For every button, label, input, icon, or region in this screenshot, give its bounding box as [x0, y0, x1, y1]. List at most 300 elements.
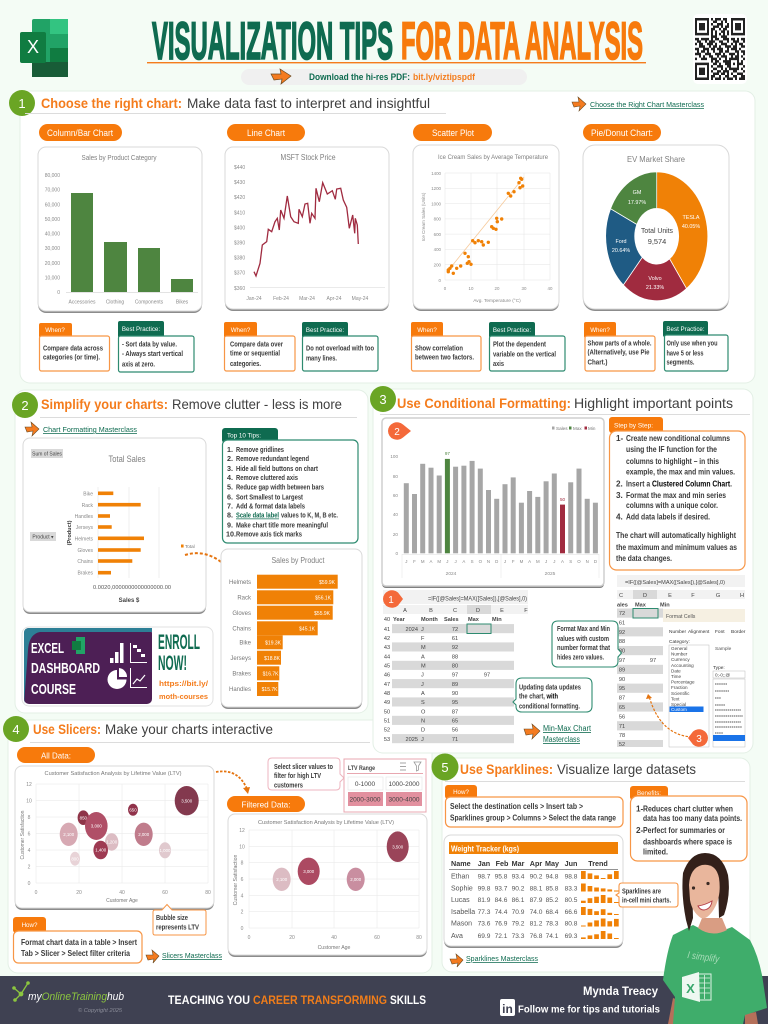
promo: excel dashboard course: moth-courses: [159, 692, 208, 701]
top 10 tips: 9.: [227, 520, 233, 530]
chart: sales by product category: 80,000: [45, 173, 60, 179]
chart: all data bubble: 6: [28, 832, 31, 838]
chart: all data bubble: 850: [80, 815, 88, 820]
spreadsheet: format cells dialog: 0;-0;;@: [715, 672, 730, 678]
spreadsheet: format cells dialog: Special: [671, 702, 686, 707]
table: weight tracker: 72.1: [495, 933, 508, 940]
chart: ice cream scatter: 1400: [431, 171, 442, 176]
step by step: 4.: [616, 512, 623, 522]
benefits box: 2-: [636, 826, 644, 835]
chart: filtered bubble: 2,000: [350, 877, 362, 882]
chart: sales by product category: 40,000: [45, 232, 60, 238]
spreadsheet: format cells dialog: Currency: [671, 657, 690, 662]
chart: min max columns: A: [561, 559, 564, 564]
author: Mynda Treacy: [583, 984, 658, 998]
chart: min max columns: 0: [395, 551, 398, 556]
benefits box: [630, 786, 747, 861]
chart: min max columns: 100: [390, 454, 398, 459]
table: weight tracker: 70.9: [512, 909, 525, 916]
heading 1: Make data fast to interpret and insightful: [187, 95, 430, 111]
chart: filtered bubble: Customer Satisfaction: [233, 855, 239, 905]
table: weight tracker: 80.8: [565, 920, 578, 928]
author: [500, 984, 660, 1016]
callout: format max and min: hides zero values.: [557, 652, 604, 662]
chart: total sales cluttered: Gloves: [77, 548, 93, 554]
table: weight tracker: 66.6: [565, 909, 578, 916]
chart: ice cream scatter: 800: [434, 216, 442, 222]
chart: sales by product clean: $19.3K: [265, 640, 282, 646]
chart: sales by product category: 0: [57, 290, 60, 296]
chart: MSFT stock price: MSFT Stock Price: [280, 153, 336, 162]
chart: min max columns: 2025: [545, 571, 556, 577]
spreadsheet: format cells dialog: 88: [619, 639, 625, 645]
chart: all data bubble: 1,400: [95, 848, 107, 853]
chart: EV market share donut: 21.33%: [646, 285, 664, 291]
link: min max masterclass: [524, 724, 592, 744]
spreadsheet: format cells dialog: 92: [619, 630, 625, 636]
when box: When?: [45, 327, 65, 334]
chart: sales by product clean: Sales by Product: [272, 556, 325, 565]
spreadsheet: left table: 71: [452, 737, 458, 743]
callout: format max and min: [552, 621, 622, 667]
line chart block: [224, 124, 389, 371]
top 10 tips: Hide all field buttons on chart: [236, 464, 318, 473]
table: weight tracker: 81.2: [530, 920, 543, 928]
spreadsheet: format cells dialog: 65: [619, 705, 625, 711]
top 10 tips: Remove axis tick marks: [236, 530, 302, 538]
chart: min max columns: M: [520, 559, 524, 564]
chart: min max columns: J: [405, 559, 407, 564]
chart: all data bubble: 60: [162, 890, 168, 896]
table: weight tracker: Lucas: [451, 897, 470, 904]
spreadsheet: left table: M: [421, 664, 426, 670]
step by step: 1-: [616, 434, 624, 443]
spreadsheet: format cells dialog: Percentage: [671, 680, 695, 685]
spreadsheet: left table: A: [421, 691, 425, 697]
chart: min max columns: J: [454, 559, 457, 564]
best practice box: axis: [493, 359, 504, 368]
chart: filtered bubble: Customer Age: [318, 945, 351, 951]
spreadsheet: format cells dialog: =IF([@Sales]=MAX([Sales]),[@Sales],0): [625, 580, 725, 586]
badge 1: [9, 90, 35, 116]
spreadsheet: left table: 42: [384, 636, 390, 642]
benefits box: dashboards where space is: [643, 838, 732, 846]
table: weight tracker: Ethan: [451, 874, 469, 880]
table: weight tracker: 76.8: [530, 933, 543, 940]
benefits box: Perfect for summaries or: [643, 826, 726, 835]
chart: total sales cluttered: Sum of Sales: [32, 452, 62, 458]
panel: use sparklines: [432, 754, 750, 972]
top 10 tips: 5.: [227, 482, 233, 492]
when box: When?: [590, 327, 610, 334]
best practice box: Best Practice:: [122, 326, 160, 333]
how box: Tab > Slicer > Select filter criteria: [21, 949, 130, 958]
step by step: Create new conditional columns: [626, 434, 730, 443]
spreadsheet: format cells dialog: Scientific: [671, 691, 690, 696]
spreadsheet: left table: 89: [452, 682, 458, 688]
when box: time or sequential: [230, 348, 280, 358]
chart: EV market share donut: [583, 145, 729, 311]
icon: shirt excel logo: [682, 972, 711, 1002]
table: weight tracker: Jun: [565, 859, 577, 868]
when box: Show correlation: [415, 344, 463, 352]
table: weight tracker: 73.6: [478, 920, 491, 928]
when box: When?: [417, 327, 437, 334]
chart: all data bubble: 650: [129, 807, 137, 812]
chart: min max columns: J: [553, 559, 555, 564]
chart: sales by product clean: [221, 549, 362, 709]
chart: min max columns: D: [594, 559, 597, 564]
chart: filtered bubble: [228, 814, 427, 957]
callout: sparklines are mini charts: [616, 883, 678, 907]
best practice box: Do not overload with too: [306, 344, 374, 352]
chart: MSFT stock price: $370: [234, 270, 245, 276]
spreadsheet: format cells dialog: Date: [671, 668, 681, 673]
how box: Sparklines group > Columns > Select the data range: [450, 814, 616, 822]
spreadsheet: format cells dialog: 95: [619, 686, 625, 692]
top 10 tips: Add & format data labels: [236, 502, 305, 510]
spreadsheet: left table: 80: [452, 664, 458, 670]
how box: How?: [22, 922, 38, 929]
icon: excel small: [72, 637, 85, 654]
pill: filtered data: Filtered Data:: [242, 800, 290, 810]
tagline: CAREER TRANSFORMING: [253, 993, 387, 1007]
chart: sales by product clean: Rack: [237, 596, 252, 602]
spreadsheet: left table: 92: [452, 645, 458, 651]
chart: min max columns: O: [577, 559, 581, 564]
best practice box: [663, 321, 728, 371]
chart: filtered bubble: 12: [239, 828, 245, 834]
logo: © Copyright 2025: [78, 1007, 122, 1014]
link: chart masterclass: Choose the Right Chart Masterclass: [590, 100, 704, 109]
spreadsheet: left table: F: [524, 608, 528, 614]
chart: min max columns: A: [462, 559, 465, 564]
chart: filtered bubble: 2,100: [276, 877, 288, 882]
chart: EV market share donut: EV Market Share: [627, 155, 686, 164]
pill: all data: All Data:: [41, 750, 71, 760]
spreadsheet: format cells dialog: ales: [617, 602, 628, 608]
chart: min max columns: M: [437, 559, 441, 564]
spreadsheet: left table: 87: [452, 710, 458, 716]
link: min max masterclass: Masterclass: [543, 735, 580, 744]
heading 1: [25, 95, 446, 114]
badge: step 1: [383, 590, 403, 608]
callout: sparklines are mini charts: in-cell mini charts.: [622, 896, 671, 904]
download link pill: bit.ly/viztipspdf: [413, 72, 476, 82]
spreadsheet: format cells dialog: 80: [619, 649, 625, 655]
top 10 tips: 7.: [227, 502, 233, 510]
callout: select slicer values: Select slicer values to: [274, 762, 333, 771]
best practice box: Best Practice:: [306, 327, 344, 334]
top 10 tips: Remove redundant legend: [236, 454, 309, 463]
chart: filtered bubble: 2: [241, 910, 244, 916]
spreadsheet: format cells dialog: Accounting: [671, 663, 694, 668]
footer: [0, 976, 768, 1024]
best practice box: Best Practice:: [493, 327, 531, 334]
spreadsheet: left table: 97: [484, 672, 490, 678]
spreadsheet: left table: 51: [384, 718, 390, 724]
spreadsheet: left table: 72: [452, 627, 458, 633]
chart: ice cream scatter: 200: [434, 262, 442, 268]
callout: select slicer values: [268, 758, 344, 790]
table: weight tracker: 86.1: [512, 897, 525, 904]
chart: total sales cluttered: Jerseys: [76, 525, 93, 531]
spreadsheet: left table: J: [421, 682, 424, 688]
chart: MSFT stock price: [225, 147, 389, 311]
step by step: Add data labels if desired.: [626, 512, 710, 522]
table: weight tracker: 74.4: [495, 909, 508, 916]
chart: filtered bubble: 60: [374, 935, 380, 941]
chart: MSFT stock price: $400: [234, 226, 245, 232]
chart: all data bubble: 1,000: [160, 848, 171, 853]
chart: MSFT stock price: $360: [234, 286, 245, 292]
chart: EV market share donut: 40.05%: [682, 224, 700, 230]
spreadsheet: left table: 44: [384, 654, 390, 660]
chart: all data bubble: 2,100: [63, 832, 75, 837]
photo: presenter: [663, 853, 767, 1024]
table: weight tracker: 81.9: [478, 897, 491, 904]
scatter plot block: [411, 124, 565, 371]
chart: total sales cluttered: Helmets: [75, 536, 93, 542]
chart: min max columns: J: [545, 559, 547, 564]
spreadsheet: format cells dialog: Time: [671, 674, 681, 679]
chart: sales by product category: 60,000: [45, 202, 60, 208]
chart: sales by product clean: Chains: [232, 626, 251, 632]
promo: excel dashboard course: NOW!: [158, 652, 187, 675]
slicer: LTV range: 0-1000: [355, 781, 375, 788]
spreadsheet: left table: D: [421, 728, 425, 734]
table: weight tracker: Isabella: [451, 909, 475, 916]
link: chart formatting masterclass: Chart Formatting Masterclass: [43, 425, 137, 434]
chart: MSFT stock price: $410: [234, 210, 245, 216]
chart: min max columns: S: [471, 559, 474, 564]
chart: filtered bubble: 6: [241, 877, 244, 883]
table: weight tracker: 98.7: [478, 874, 491, 880]
table: weight tracker: [444, 835, 623, 948]
chart: ice cream scatter: 30: [522, 286, 527, 291]
spreadsheet: format cells dialog: C: [619, 593, 623, 599]
link: sparklines masterclass: Sparklines Masterclass: [466, 954, 538, 963]
spreadsheet: format cells dialog: 72: [619, 611, 625, 617]
best practice box: [489, 322, 565, 371]
spreadsheet: left table: S: [421, 700, 425, 706]
chart: EV market share donut: 20.64%: [612, 248, 630, 254]
chart: filtered bubble: 8: [241, 861, 244, 867]
table: weight tracker: Feb: [496, 859, 509, 868]
spreadsheet: format cells dialog: Custom: [671, 707, 687, 712]
spreadsheet: format cells dialog: Font: [715, 629, 725, 635]
chart: total sales cluttered: 0.0020,0000000000000000.00: [93, 585, 171, 591]
table: weight tracker: 74.1: [546, 933, 559, 940]
callout: updating data: the chart, with: [519, 692, 558, 700]
chart: total sales cluttered: Total Sales: [108, 454, 146, 465]
badge 5: 5: [441, 760, 449, 775]
table: weight tracker: 79.2: [512, 920, 525, 928]
chart: min max columns: Max: [573, 426, 582, 431]
chart: all data bubble: 4: [28, 848, 31, 854]
chart: filtered bubble: 80: [416, 935, 422, 941]
step by step: the data changes.: [616, 554, 672, 563]
step by step: 2.: [616, 480, 623, 488]
chart: total sales cluttered: Bike: [83, 492, 93, 498]
chart: sales by product clean: $18.8K: [264, 656, 281, 662]
callout: updating data: conditional formatting.: [519, 702, 580, 710]
spreadsheet: left table: Year: [393, 617, 406, 623]
best practice box: [302, 322, 378, 371]
table: weight tracker: Name: [451, 859, 471, 868]
heading 3: Use Conditional Formatting:: [397, 395, 571, 411]
chart: min max columns: S: [569, 559, 572, 564]
heading 3: [380, 395, 750, 415]
chart: all data bubble: 8: [28, 815, 31, 821]
chart: sales by product category: Sales by Product Category: [82, 153, 157, 162]
line chart block: Line Chart: [247, 128, 285, 138]
chart: EV market share donut: Total Units: [641, 226, 673, 235]
chart: sales by product clean: Jerseys: [230, 656, 251, 662]
icons: charts: [108, 643, 147, 689]
chart: sales by product category: 20,000: [45, 261, 60, 267]
chart: MSFT stock price: $420: [234, 195, 245, 201]
chart: min max columns: M: [421, 559, 425, 564]
chart: EV market share donut: 17.97%: [628, 200, 646, 206]
when box: Show parts of a whole.: [588, 338, 652, 348]
spreadsheet: format cells dialog: 97: [650, 658, 656, 664]
badge 5: [432, 754, 458, 780]
table: weight tracker: Mar: [512, 859, 525, 868]
chart: all data bubble: Customer Satisfaction Analysis by Lifetime Value (LTV): [44, 771, 182, 777]
chart: filtered bubble: 3,500: [392, 844, 404, 849]
spreadsheet: left table: Sales: [444, 617, 459, 623]
header: [20, 12, 747, 85]
chart: all data bubble: 3,000: [91, 824, 102, 829]
download link pill: Download the hi-res PDF:: [309, 72, 410, 82]
top 10 tips: 1.: [227, 445, 233, 454]
when box: Compare data over: [230, 340, 283, 348]
table: weight tracker: 85.2: [546, 897, 559, 904]
when box: [411, 322, 481, 371]
spreadsheet: format cells dialog: Fraction: [671, 685, 688, 690]
when box: [39, 323, 110, 371]
chart: ice cream scatter: 40: [548, 286, 553, 291]
spreadsheet: left table: Max: [468, 617, 480, 623]
spreadsheet: left table: A: [421, 654, 425, 660]
best practice box: many lines.: [306, 354, 337, 362]
top 10 tips: Scale data label: [236, 510, 279, 520]
chart: min max columns: J: [446, 559, 449, 564]
table: weight tracker: Ava: [451, 933, 463, 940]
chart: ice cream scatter: [413, 145, 559, 311]
badge: step 2: [388, 422, 411, 440]
chart: total sales cluttered: [23, 438, 206, 614]
heading 5: Visualize large datasets: [557, 761, 696, 777]
spreadsheet: format cells dialog: 56: [619, 714, 625, 720]
table: weight tracker: 69.3: [565, 933, 578, 940]
chart: ice cream scatter: 0: [439, 278, 442, 283]
chart: sales by product clean: Handles: [229, 687, 251, 693]
sparklines: [581, 871, 619, 939]
slicer: LTV range: 2000-3000: [349, 796, 381, 804]
when box: Chart.): [588, 358, 608, 366]
tagline: TEACHING YOU: [168, 993, 250, 1007]
best practice box: - Sort data by value.: [122, 340, 177, 348]
spreadsheet: left table: 65: [452, 718, 458, 724]
spreadsheet: format cells dialog: Sample: [715, 646, 732, 652]
chart: all data bubble: 2,000: [138, 832, 150, 837]
table: weight tracker: 98.8: [565, 874, 578, 880]
chart: sales by product category: 10,000: [45, 275, 60, 281]
link: slicers masterclass: [146, 950, 222, 963]
best practice box: Best Practice:: [666, 326, 705, 333]
pill: all data: [17, 747, 95, 763]
heading 4: [30, 721, 370, 743]
chart: filtered bubble: 40: [331, 935, 337, 941]
spreadsheet: left table: 46: [384, 672, 390, 678]
chart: sales by product clean: Gloves: [232, 611, 251, 617]
chart: MSFT stock price: Feb-24: [273, 296, 289, 302]
link: min max masterclass: Min-Max Chart: [543, 724, 592, 733]
spreadsheet: left table: 40: [384, 617, 390, 623]
chart: min max columns: A: [430, 559, 433, 564]
spreadsheet: left table: 90: [452, 691, 458, 697]
chart: all data bubble: 20: [76, 890, 82, 896]
QR code: [693, 14, 747, 84]
title: VISUALIZATION TIPS: [152, 12, 393, 71]
spreadsheet: left table: 2025: [406, 737, 418, 743]
chart: MSFT stock price: $430: [234, 180, 245, 186]
table: weight tracker: 73.3: [512, 933, 525, 940]
link: slicers masterclass: Slicers Masterclass: [162, 951, 222, 960]
callout: bubble size: [153, 904, 206, 935]
chart: total sales cluttered: Handles: [75, 514, 93, 520]
promo: excel dashboard course: ENROLL: [158, 631, 200, 654]
spreadsheet: format cells dialog: Format Cells: [666, 614, 696, 620]
chart: all data bubble: 3,500: [181, 798, 193, 803]
chart: EV market share donut: Volvo: [648, 276, 662, 282]
step by step: the maximum and minimum values as: [616, 543, 737, 552]
pill: filtered data: [227, 796, 305, 812]
step by step: Insert a Clustered Column Chart.: [626, 480, 732, 488]
chart: total sales cluttered: Rack: [82, 503, 93, 509]
step by step: columns to highlight – in this: [626, 457, 719, 466]
spreadsheet: format cells dialog: D: [643, 593, 647, 599]
callout: bubble size: Bubble size: [156, 913, 188, 922]
table: weight tracker: 68.4: [546, 909, 559, 916]
slicer: LTV range: [344, 759, 426, 812]
best practice box: have 5 or less: [666, 348, 704, 358]
icon: Excel logo: X: [27, 37, 39, 57]
spreadsheet: left table: F: [421, 636, 425, 642]
spreadsheet: left table: O: [421, 710, 426, 716]
author: Follow me for tips and tutorials: [518, 1004, 660, 1016]
chart: filtered bubble: 3,000: [303, 869, 315, 874]
heading 1: Choose the right chart:: [41, 95, 182, 111]
chart: all data bubble: 40: [119, 890, 125, 896]
top 10 tips: [222, 428, 358, 543]
chart: sales by product clean: Brakes: [232, 672, 251, 678]
table: weight tracker: 69.9: [478, 933, 491, 940]
chart: sales by product clean: $16.7K: [263, 672, 279, 678]
step by step: Step by Step:: [614, 422, 653, 430]
spreadsheet: left table: D: [476, 608, 480, 614]
chart: min max columns: A: [528, 559, 531, 564]
heading 5: Use Sparklines:: [460, 761, 553, 777]
best practice box: axis at zero.: [122, 360, 155, 368]
spreadsheet: left table: 49: [384, 700, 390, 706]
chart: sales by product category: Components: [135, 300, 164, 306]
table: weight tracker: 87.9: [530, 897, 543, 904]
icon: shirt excel logo: X: [686, 981, 695, 996]
slicer: LTV range: LTV Range: [348, 765, 375, 772]
